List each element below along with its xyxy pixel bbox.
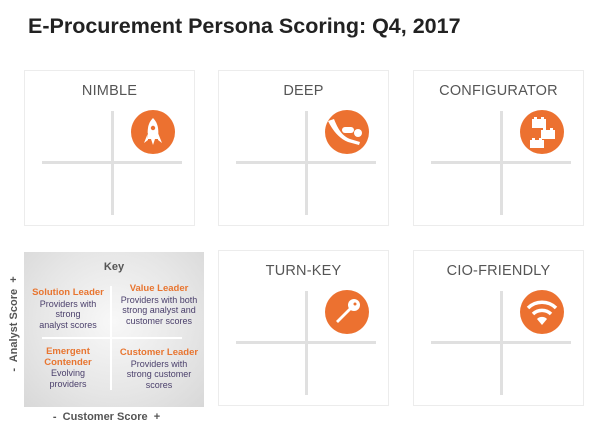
panel: turn-key — [218, 250, 389, 406]
key: value leader: customer scores — [126, 316, 192, 326]
key: solution leader: analyst scores — [39, 320, 97, 330]
key: emergent contender: Emergent — [46, 346, 90, 357]
key: emergent contender: providers — [49, 378, 86, 388]
panel: nimble — [24, 70, 195, 226]
axis label: customer score: - Customer Score + — [53, 411, 160, 423]
key: emergent contender: Evolving — [51, 368, 85, 378]
key: emergent contender: Contender — [44, 356, 92, 368]
key: value leader: Value Leader — [130, 283, 188, 294]
key: solution leader: strong — [55, 309, 80, 319]
key: customer leader: scores — [146, 380, 172, 390]
key: emergent contender — [44, 346, 92, 389]
key: solution leader: Solution Leader — [32, 287, 104, 298]
panel: nimble: NIMBLE — [82, 83, 137, 99]
icon: key — [325, 290, 369, 334]
panel: deep — [218, 70, 389, 226]
key: value leader: strong analyst and — [122, 305, 196, 315]
panel: deep: DEEP — [283, 83, 324, 99]
panel: configurator — [413, 70, 584, 226]
panel: cio-friendly: CIO-FRIENDLY — [447, 263, 550, 279]
key heading: Key — [104, 261, 124, 273]
key: customer leader — [120, 347, 198, 390]
key: solution leader: Providers with — [40, 298, 96, 308]
panel: cio-friendly — [413, 250, 584, 406]
panel: configurator: CONFIGURATOR — [439, 83, 558, 99]
title: E-Procurement Persona Scoring: Q4, 2017 — [28, 14, 461, 38]
key: solution leader — [32, 287, 104, 330]
key: customer leader: Providers with — [131, 358, 187, 368]
key: customer leader: Customer Leader — [120, 347, 198, 358]
key panel — [24, 252, 204, 407]
icon: rocket — [131, 110, 175, 154]
icon: blocks — [520, 110, 564, 154]
key: value leader: Providers with both — [121, 294, 197, 304]
panel: turn-key: TURN-KEY — [266, 263, 341, 279]
key: customer leader: strong customer — [127, 369, 191, 379]
key: value leader — [121, 283, 197, 326]
icon: wifi — [520, 290, 564, 334]
icon: diver — [325, 110, 369, 154]
axis label: analyst score: - Analyst Score + — [8, 276, 20, 372]
